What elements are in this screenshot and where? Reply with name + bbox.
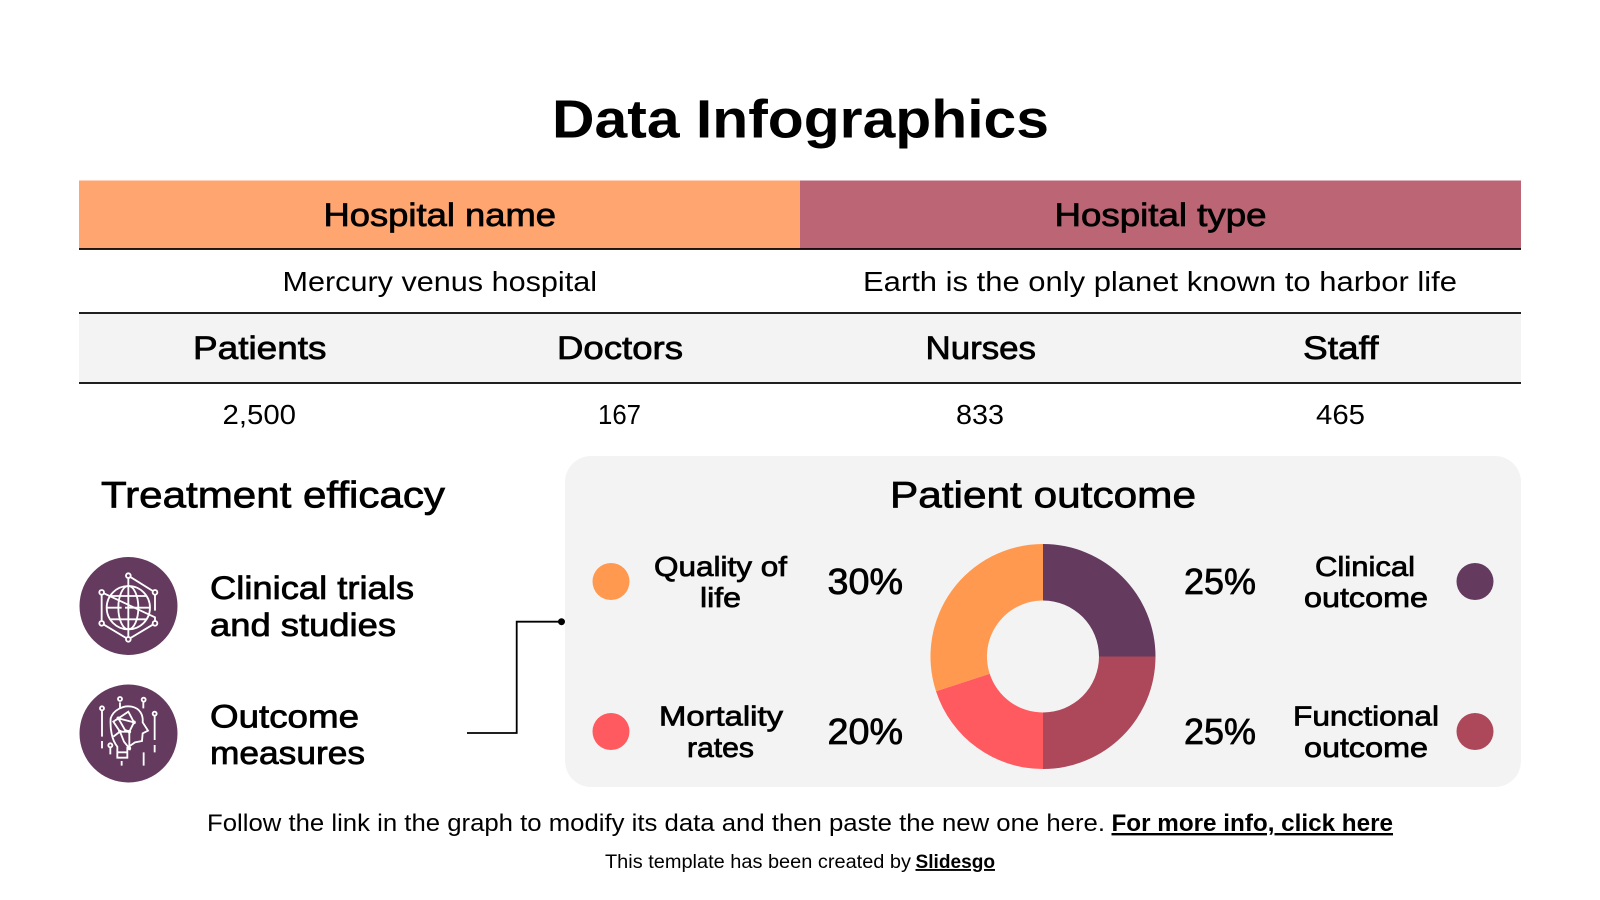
title: Data Infographics [552, 90, 1049, 150]
credit line: This template has been created by [605, 852, 912, 873]
legend: mortality rates: 20% [828, 711, 903, 752]
label: clinical trials and studies: Clinical trials [210, 570, 414, 606]
footer note: Follow the link in the graph to modify its data and then paste the new one here. [207, 810, 1105, 837]
legend: mortality rates: rates [687, 732, 754, 763]
label: outcome measures [210, 698, 365, 771]
arrow: connector [467, 618, 565, 733]
heading: treatment efficacy: Treatment efficacy [101, 474, 446, 516]
header cell: hospital type [800, 180, 1521, 249]
credit line: Slidesgo [916, 852, 995, 873]
legend: functional outcome [1184, 700, 1494, 763]
legend: clinical outcome: 25% [1184, 561, 1256, 602]
header cell: hospital name [79, 180, 800, 249]
legend: functional outcome: outcome [1304, 732, 1428, 763]
donut chart [930, 544, 1156, 769]
row: hospital values [282, 266, 1457, 297]
panel: patient outcome [565, 456, 1521, 787]
legend: quality of life: life [700, 582, 741, 613]
row: staff headings: Doctors [557, 330, 683, 366]
legend: quality of life: Quality of [654, 551, 787, 582]
legend: mortality rates [592, 700, 903, 763]
legend: functional outcome: Functional [1293, 700, 1439, 732]
row: staff numbers: 2,500 [222, 399, 296, 430]
row: staff headings: Nurses [926, 330, 1036, 366]
label: clinical trials and studies [210, 570, 414, 643]
row: staff numbers [222, 399, 1365, 430]
legend: functional outcome: 25% [1184, 711, 1256, 752]
legend: quality of life: 30% [828, 561, 903, 602]
row: staff headings: Patients [193, 330, 326, 366]
icon: globe network [80, 557, 178, 655]
row: staff numbers: 833 [956, 399, 1004, 430]
row: staff numbers: 465 [1316, 399, 1365, 430]
header cell: hospital name: Hospital name [324, 197, 556, 233]
heading: patient outcome: Patient outcome [890, 474, 1196, 516]
label: outcome measures: Outcome [210, 698, 359, 734]
legend: quality of life [592, 551, 903, 613]
row: staff headings: Staff [1303, 330, 1379, 366]
legend: mortality rates: Mortality [659, 700, 783, 732]
footer note: For more info, click here [1112, 810, 1393, 837]
legend: clinical outcome [1184, 551, 1494, 613]
row: staff numbers: 167 [598, 399, 641, 430]
row: staff headings [79, 313, 1521, 383]
label: outcome measures: measures [210, 735, 365, 771]
table: hospital information [79, 180, 1521, 430]
legend: clinical outcome: outcome [1304, 582, 1428, 613]
row: hospital values: Earth is the only planet known to harbor life [863, 266, 1457, 297]
row: hospital values: Mercury venus hospital [282, 266, 597, 297]
icon: AI head [80, 684, 178, 782]
header cell: hospital type: Hospital type [1054, 197, 1266, 233]
label: clinical trials and studies: and studies [210, 607, 396, 643]
legend: clinical outcome: Clinical [1315, 551, 1415, 582]
